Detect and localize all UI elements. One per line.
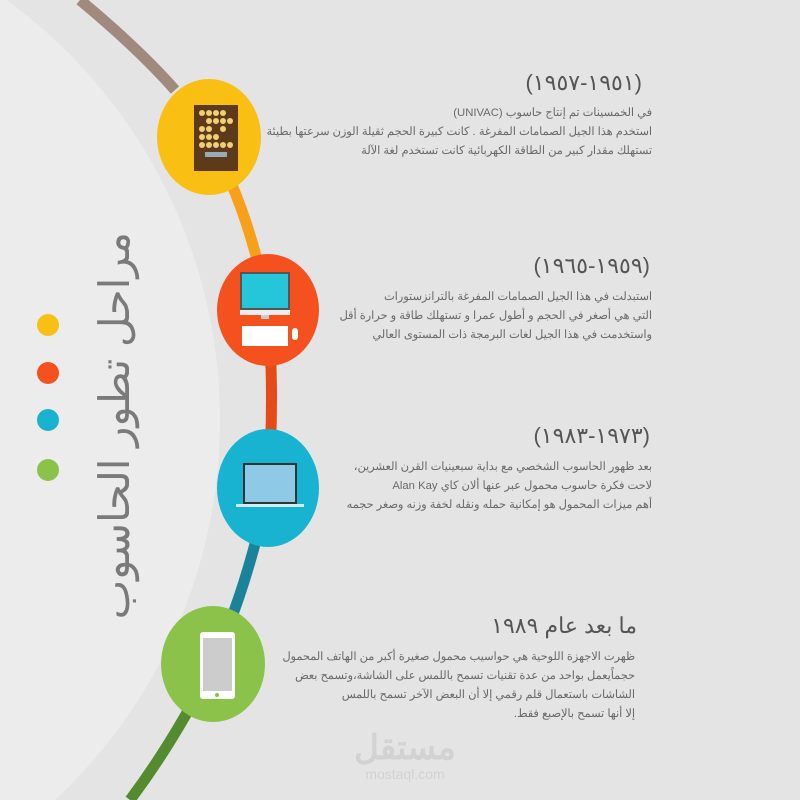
icon: vacuum tube computer bbox=[157, 79, 261, 195]
icon: tablet bbox=[161, 606, 265, 722]
watermark: مستقل bbox=[354, 729, 456, 767]
text 4: إلا أنها تسمح بالإصبع فقط. bbox=[514, 708, 635, 720]
text 2 bbox=[340, 291, 652, 341]
text 1: في الخمسينات تم إنتاج حاسوب (UNIVAC) bbox=[453, 107, 652, 119]
text 1 bbox=[266, 107, 652, 157]
text 1: استخدم هذا الجيل الصمامات المفرغة . كانت كبيرة الحجم ثقيلة الوزن سرعتها بطيئة bbox=[266, 126, 652, 138]
watermark: mostaql.com bbox=[365, 766, 445, 782]
text 4: الشاشات باستعمال قلم رقمي إلا أن البعض الآخر تسمح باللمس bbox=[342, 689, 635, 701]
text 3 bbox=[347, 461, 652, 511]
text 2: استبدلت في هذا الجيل الصمامات المفرغة بالترانزستورات bbox=[384, 291, 652, 303]
text 3: أهم ميزات المحمول هو إمكانية حمله ونقله لخفة وزنه وصغر حجمه bbox=[347, 499, 652, 511]
icon: desktop computer bbox=[217, 254, 319, 366]
text 3: بعد ظهور الحاسوب الشخصي مع بداية سبعينيات القرن العشرين، bbox=[354, 461, 652, 473]
text 1: تستهلك مقدار كبير من الطاقة الكهربائية كانت تستخدم لغة الآلة bbox=[361, 145, 652, 157]
text 4: حجماًيعمل بواحد من عدة تقنيات تسمح باللمس على الشاشة،وتسمح بعض bbox=[295, 670, 635, 682]
text 2: التي هي أصغر في الحجم و أطول عمرا و تستهلك طاقة و حرارة أقل bbox=[340, 310, 652, 322]
title: مراحل تطور الحاسوب bbox=[91, 232, 138, 619]
text 3: لاحت فكرة حاسوب محمول عبر عنها ألان كاي Alan Kay bbox=[392, 480, 652, 492]
heading 3: (١٩٨٣-١٩٧٣) bbox=[533, 423, 650, 448]
legend dots bbox=[37, 314, 59, 481]
heading 4: ما بعد عام ١٩٨٩ bbox=[491, 613, 637, 638]
icon: laptop bbox=[217, 429, 319, 547]
heading 1: (١٩٥٧-١٩٥١) bbox=[525, 70, 642, 95]
text 4: ظهرت الاجهزة اللوحية هي حواسيب محمول صغيرة أكبر من الهاتف المحمول bbox=[282, 651, 635, 663]
text 4 bbox=[282, 648, 635, 720]
text 2: واستخدمت في هذا الجيل لغات البرمجة ذات المستوى العالي bbox=[372, 329, 652, 341]
heading 2: (١٩٦٥-١٩٥٩) bbox=[533, 253, 650, 278]
